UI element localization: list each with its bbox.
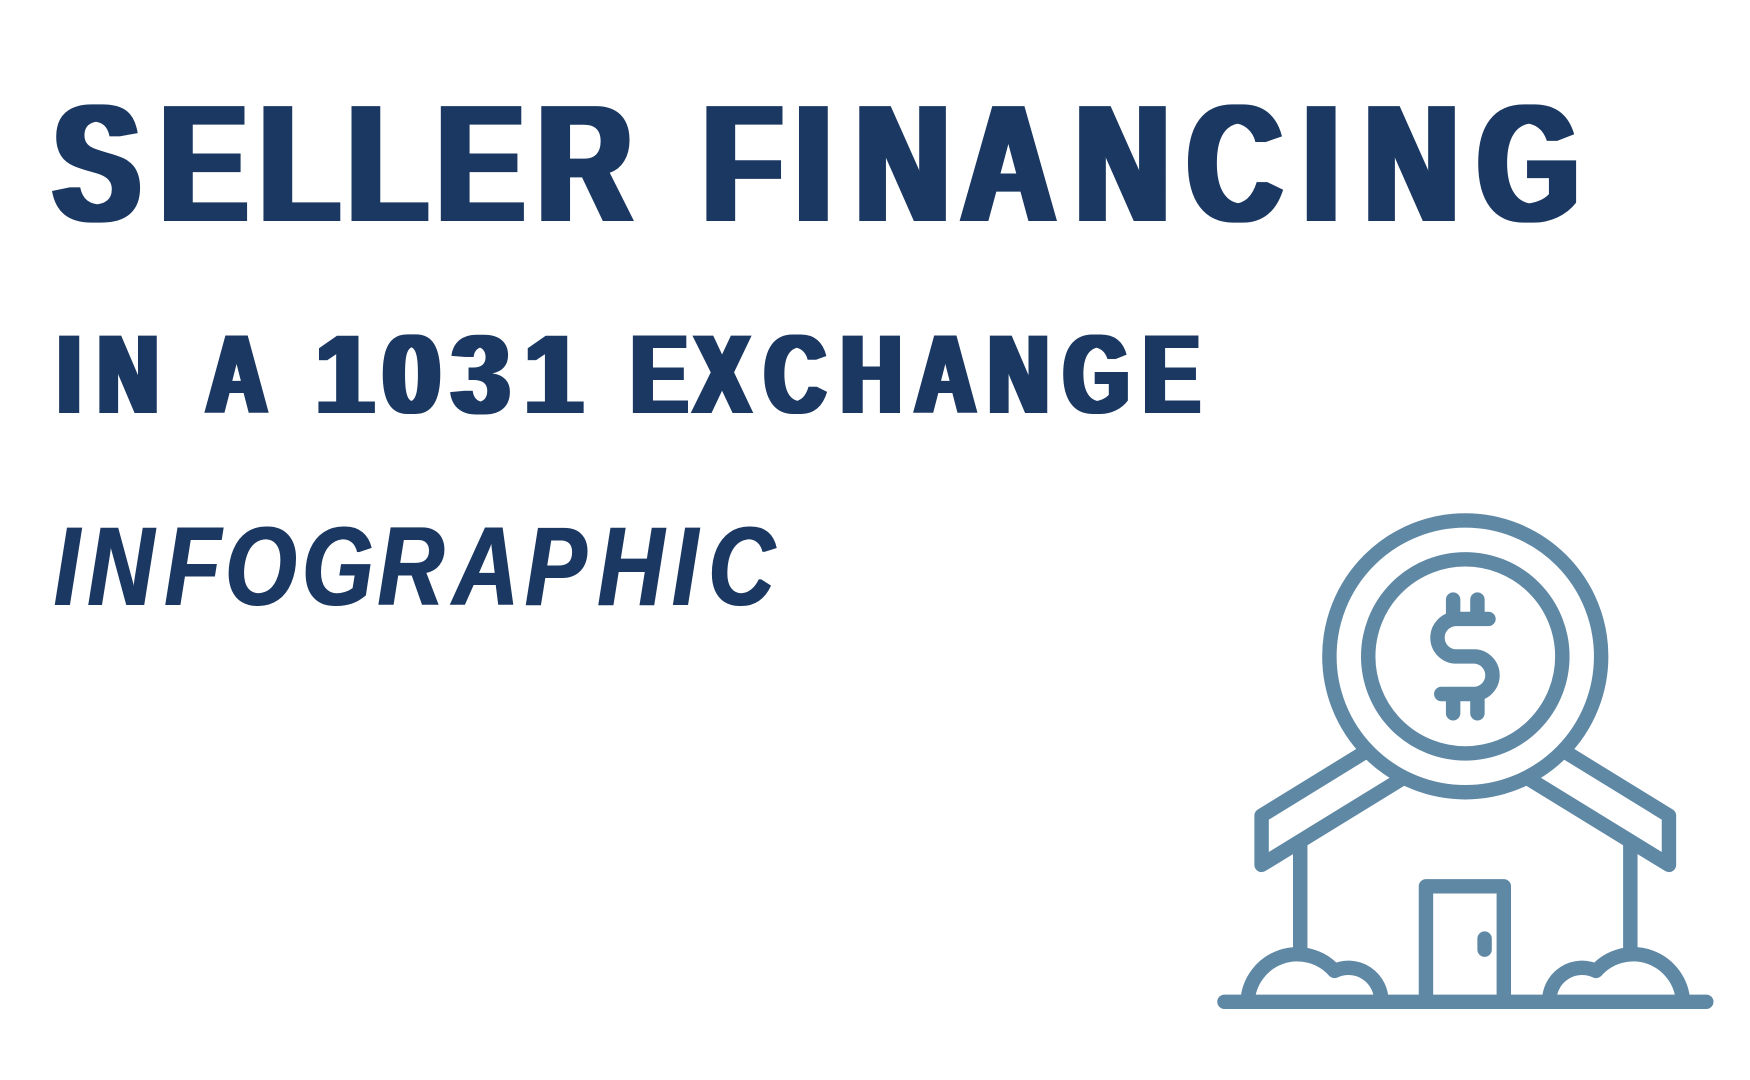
icon part: magnifier inner ring	[1368, 559, 1562, 753]
icon part: door handle	[1477, 939, 1492, 950]
icon part: right roof	[1525, 752, 1669, 865]
icon part: ground line	[1224, 995, 1706, 1009]
icon: house under magnifying glass with dollar sign	[1224, 520, 1706, 1002]
icon part: house walls	[1300, 841, 1630, 950]
title: seller financing: SELLER FINANCING	[53, 69, 1579, 257]
icon part: magnifier outer ring	[1329, 520, 1601, 792]
subtitle: in a 1031 exchange	[58, 311, 1199, 437]
label: infographic: INFOGRAPHIC	[54, 503, 777, 629]
icon part: left roof	[1262, 752, 1406, 865]
icon part: dollar sign	[1437, 600, 1492, 713]
icon part: door	[1426, 886, 1504, 1002]
icon part: right bushes	[1549, 954, 1683, 1002]
subtitle: in a 1031 exchange: EXCHANGE	[631, 311, 1199, 437]
subtitle: in a 1031 exchange: 1031	[316, 312, 583, 437]
subtitle: in a 1031 exchange: IN A	[58, 311, 267, 437]
icon part: left bushes	[1248, 954, 1381, 1002]
